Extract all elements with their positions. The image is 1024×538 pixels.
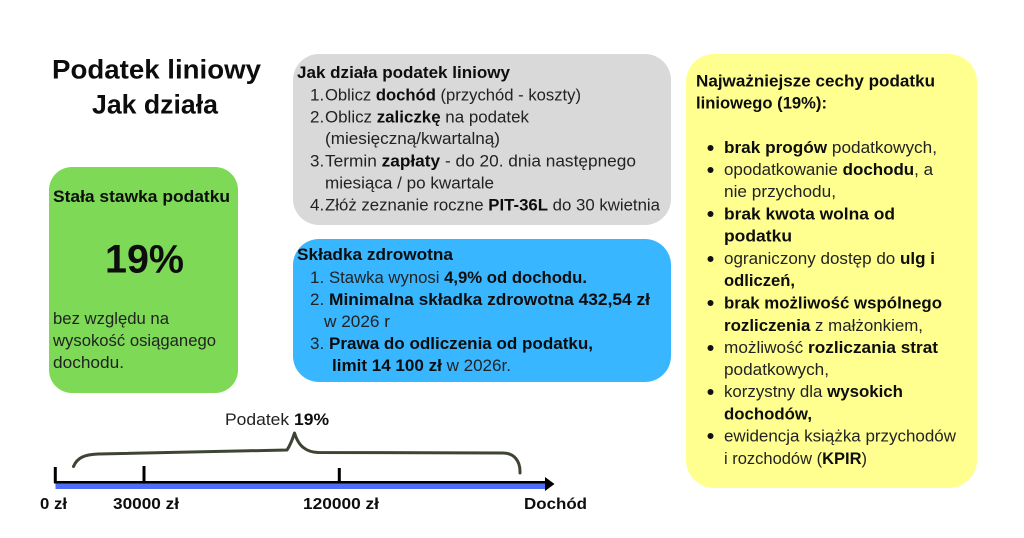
axis ticks bbox=[55, 466, 339, 483]
numbered list: steps: miesiąca / po kwartale bbox=[325, 174, 494, 192]
panel: health contribution bbox=[293, 239, 671, 382]
axis: arrow bbox=[54, 477, 554, 491]
axis labels: 120000 zł bbox=[303, 496, 380, 513]
text block: regardless of income: dochodu. bbox=[53, 353, 124, 372]
numbered list: contribution facts: 3. bbox=[310, 334, 324, 353]
text block: regardless of income: wysokość osiąganego bbox=[52, 331, 216, 350]
bullet list: features: podatku bbox=[724, 226, 792, 246]
bullet list: features: opodatkowanie dochodu, a bbox=[724, 160, 934, 179]
panel: how the flat tax works bbox=[293, 54, 671, 225]
panel heading: key features: Najważniejsze cechy podatku bbox=[696, 72, 935, 90]
panel heading: flat rate: Stała stawka podatku bbox=[53, 187, 230, 206]
bullet list: features: brak kwota wolna od bbox=[724, 204, 895, 224]
bracket bbox=[74, 433, 520, 473]
title: Podatek liniowy bbox=[52, 54, 261, 84]
text block: regardless of income bbox=[52, 309, 216, 372]
chart: income axis with flat tax bracket bbox=[40, 410, 587, 513]
axis labels: 0 zł bbox=[40, 496, 68, 513]
panel: flat tax rate bbox=[49, 167, 238, 393]
numbered list: steps: (miesięczną/kwartalną) bbox=[325, 129, 500, 148]
axis labels bbox=[40, 496, 587, 513]
text block: regardless of income: bez względu na bbox=[53, 309, 170, 328]
numbered list: contribution facts: Stawka wynosi 4,9% od dochodu. bbox=[329, 268, 587, 287]
numbered list: steps: 4. bbox=[310, 196, 324, 214]
bullet list: features: możliwość rozliczania strat bbox=[724, 338, 938, 357]
panel heading: key features: liniowego (19%): bbox=[696, 94, 827, 112]
bullet list: features: rozliczenia z małżonkiem, bbox=[724, 316, 923, 335]
label: tax 19%: Podatek 19% bbox=[225, 410, 329, 429]
numbered list: contribution facts: w 2026 r bbox=[323, 312, 390, 331]
bullet list: features: brak możliwość wspólnego bbox=[724, 294, 942, 312]
panel: key features bbox=[686, 54, 977, 488]
bullet list: features: nie przychodu, bbox=[724, 182, 836, 201]
panel heading: how it works: Jak działa podatek liniowy bbox=[297, 63, 511, 82]
title: Jak działa bbox=[92, 90, 218, 120]
numbered list: steps bbox=[310, 86, 661, 214]
bullet list: features: dochodów, bbox=[724, 404, 812, 424]
title bbox=[52, 54, 261, 120]
numbered list: steps: Oblicz zaliczkę na podatek bbox=[325, 108, 529, 126]
numbered list: contribution facts: 2. bbox=[310, 290, 324, 309]
panel heading: key features bbox=[696, 72, 935, 112]
bullet list: features: podatkowych, bbox=[724, 360, 829, 379]
big number: 19%: 19% bbox=[105, 238, 184, 282]
numbered list: steps: 2. bbox=[310, 108, 324, 126]
numbered list: contribution facts: Prawa do odliczenia od podatku, bbox=[329, 334, 593, 353]
axis labels: Dochód bbox=[524, 496, 587, 513]
bullet list: features: odliczeń, bbox=[724, 271, 795, 290]
panel heading: health contribution: Składka zdrowotna bbox=[297, 245, 454, 264]
bullet list: features: korzystny dla wysokich bbox=[724, 382, 903, 401]
numbered list: contribution facts: 1. bbox=[310, 268, 324, 287]
bullet list: features: ograniczony dostęp do ulg i bbox=[724, 249, 935, 268]
axis: blue income bar bbox=[56, 484, 546, 489]
numbered list: steps: Oblicz dochód (przychód - koszty) bbox=[325, 86, 581, 104]
numbered list: contribution facts: limit 14 100 zł w 2026r. bbox=[332, 356, 511, 375]
bullet list: features: i rozchodów (KPIR) bbox=[724, 449, 867, 468]
bullet list: features: brak progów podatkowych, bbox=[724, 138, 937, 157]
numbered list: contribution facts: Minimalna składka zdrowotna 432,54 zł bbox=[329, 290, 650, 309]
numbered list: steps: Złóż zeznanie roczne PIT-36L do 30 kwietnia bbox=[325, 196, 661, 214]
numbered list: contribution facts bbox=[310, 268, 650, 375]
numbered list: steps: Termin zapłaty - do 20. dnia następnego bbox=[325, 152, 636, 170]
bullet list: features: ewidencja książka przychodów bbox=[724, 426, 957, 446]
bullet list: features bbox=[708, 138, 957, 468]
numbered list: steps: 1. bbox=[310, 86, 324, 104]
axis labels: 30000 zł bbox=[113, 496, 180, 513]
numbered list: steps: 3. bbox=[310, 152, 324, 170]
